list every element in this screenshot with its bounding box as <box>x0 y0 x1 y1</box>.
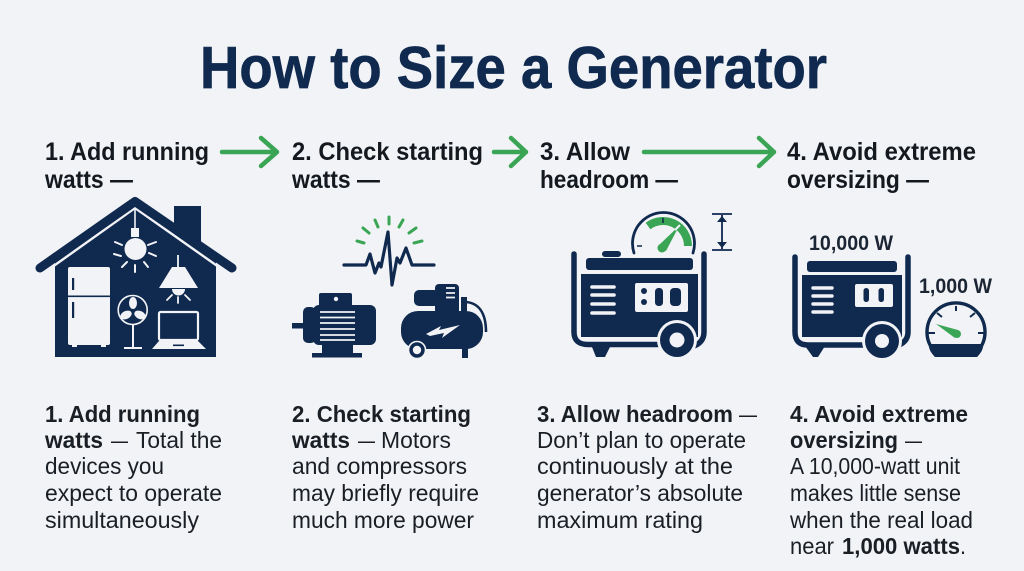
step 4 heading: oversizing — <box>787 166 929 194</box>
text block: step 1: — <box>111 427 128 453</box>
text block: step 2: may briefly require <box>292 480 479 506</box>
step 3 heading: 3. Allow <box>540 138 631 166</box>
headroom marker <box>712 214 732 250</box>
text block: step 3: continuously at the <box>537 453 733 479</box>
bulb <box>114 208 156 272</box>
arrow: step 1 to 2 <box>222 138 277 166</box>
text block: step 4: — <box>905 427 922 453</box>
text block: step 3: 3. Allow headroom <box>537 401 733 427</box>
laptop <box>152 312 206 349</box>
text block: step 2: 2. Check starting <box>292 401 471 427</box>
text block: step 1: watts <box>44 427 103 453</box>
icon: electric motor <box>292 293 376 358</box>
text block: step 3: — <box>739 401 757 427</box>
text block: step 3 <box>537 401 757 533</box>
gauge <box>632 212 694 253</box>
label: 1,000 W: 1,000 W <box>919 275 992 298</box>
arrow: step 3 to 4 <box>644 138 774 166</box>
step 2 heading: watts — <box>291 166 380 194</box>
text block: step 3: Don’t plan to operate <box>537 427 746 453</box>
pendant lamp <box>159 255 198 303</box>
text block: step 2: — <box>358 427 375 453</box>
text block: step 2 <box>291 401 479 533</box>
text block: step 1 <box>44 401 222 533</box>
text block: step 2: much more power <box>292 507 474 533</box>
text block: step 1: expect to operate <box>45 480 222 506</box>
text block: step 4: . <box>960 533 966 559</box>
text block: step 4: near <box>790 533 834 559</box>
title: How to Size a Generator <box>200 35 827 101</box>
arrow: step 2 to 3 <box>494 138 526 166</box>
fan <box>118 296 147 348</box>
label: 10,000 W: 10,000 W <box>809 232 893 255</box>
step 4 heading <box>787 138 976 194</box>
text block: step 1: 1. Add running <box>45 401 200 427</box>
icon: generator with gauge and headroom marker <box>574 212 732 360</box>
text block: step 4: A 10,000-watt unit <box>790 453 961 479</box>
text block: step 1: Total the <box>136 427 222 453</box>
step 1 heading: 1. Add running <box>45 138 209 166</box>
text block: step 1: simultaneously <box>45 507 199 533</box>
icon: spike waveform <box>344 217 434 285</box>
text block: step 4: 4. Avoid extreme <box>790 401 968 427</box>
text block: step 1: devices you <box>45 453 164 479</box>
step 3 heading <box>540 138 678 194</box>
step 2 heading: 2. Check starting <box>292 138 483 166</box>
text block: step 3: generator’s absolute <box>537 480 743 506</box>
text block: step 4: when the real load <box>789 507 973 533</box>
step 1 heading <box>44 138 209 194</box>
icon: low-load gauge <box>927 303 985 357</box>
text block: step 3: maximum rating <box>537 507 703 533</box>
step 4 heading: 4. Avoid extreme <box>787 138 976 166</box>
text block: step 4: 1,000 watts <box>842 533 960 559</box>
step 1 heading: watts — <box>44 166 133 194</box>
text block: step 4 <box>789 401 973 559</box>
text block: step 2: and compressors <box>292 453 467 479</box>
fridge <box>68 267 110 347</box>
text block: step 4: oversizing <box>790 427 898 453</box>
step 2 heading <box>291 138 483 194</box>
icon: house with appliances <box>40 202 232 357</box>
text block: step 2: Motors <box>381 427 451 453</box>
step 3 heading: headroom — <box>540 166 678 194</box>
text block: step 4: makes little sense <box>790 480 961 506</box>
icon: air compressor <box>401 284 486 358</box>
text block: step 2: watts <box>291 427 350 453</box>
icon: large generator <box>795 257 908 361</box>
